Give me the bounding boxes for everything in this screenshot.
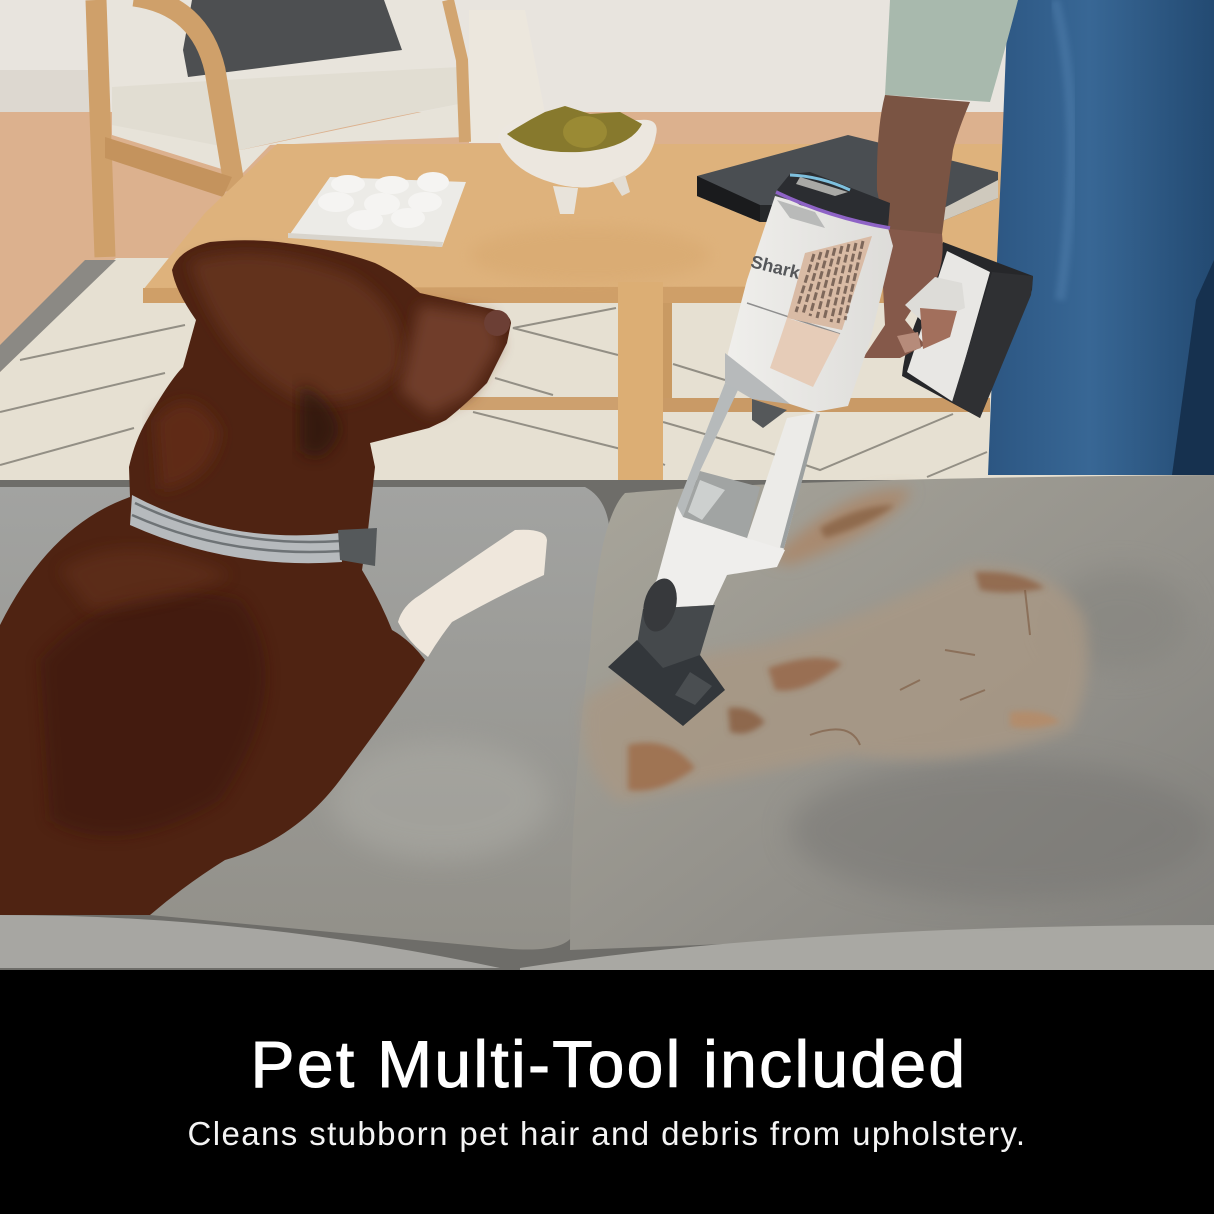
man's jeans	[988, 0, 1214, 475]
nozzle base	[608, 640, 725, 726]
shirt sleeve and arm	[877, 0, 1018, 280]
dog	[0, 240, 547, 915]
pedestal side table	[469, 10, 545, 143]
dog head highlights	[190, 254, 401, 402]
top cap	[777, 172, 890, 228]
white paw	[398, 530, 547, 657]
left clear tube	[677, 383, 738, 517]
caption band	[0, 970, 1214, 1214]
dog body shading	[40, 592, 266, 836]
battery pack	[902, 242, 1033, 418]
collar and wand	[643, 506, 785, 609]
tray with white pieces	[288, 172, 466, 247]
lower copper panel	[770, 318, 840, 387]
release button	[638, 575, 682, 635]
Shark logo: Shark	[749, 251, 803, 283]
dust chamber	[683, 471, 760, 538]
stick vacuum with pet multi-tool	[608, 172, 893, 726]
rug	[0, 258, 1214, 490]
coffee table	[143, 144, 1010, 498]
striped collar	[130, 495, 377, 566]
hand gripping the handle	[863, 228, 965, 358]
nozzle neck	[637, 605, 715, 678]
dust cone	[725, 353, 790, 404]
subheading: Cleans stubborn pet hair and debris from upholstery.	[188, 1115, 1026, 1152]
bowl with moss	[498, 106, 657, 214]
heading: Pet Multi-Tool included	[251, 1027, 967, 1101]
black book	[697, 135, 998, 222]
right frame of the clear dust cup	[747, 412, 820, 552]
photo: dog watching a stick vacuum clean pet hair from a sofa	[0, 0, 1214, 970]
copper vent panel	[787, 236, 872, 330]
room background: wall and wood floor	[0, 0, 1214, 970]
motor body	[725, 196, 893, 412]
pet hair on the cushion	[583, 489, 1088, 802]
armchair	[96, 0, 465, 257]
sofa cushions	[0, 475, 1214, 970]
